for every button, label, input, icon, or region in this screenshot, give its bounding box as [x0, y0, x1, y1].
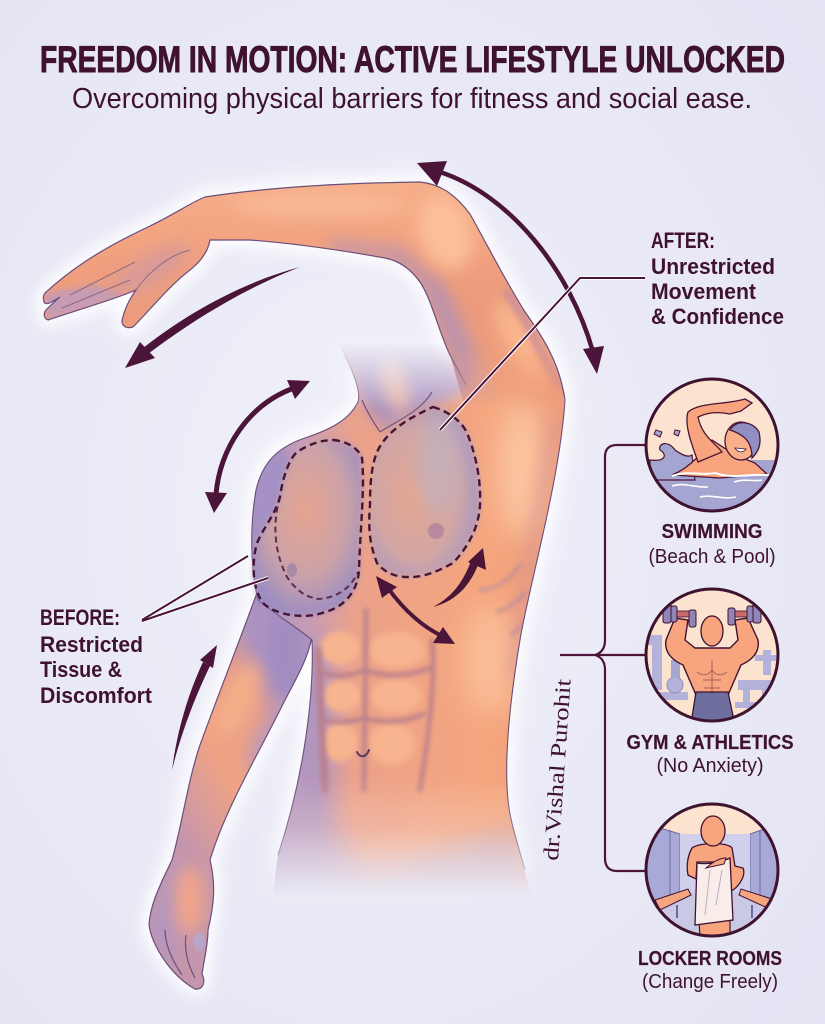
locker rooms label: [638, 948, 782, 993]
arrow: chest diagonal: [376, 576, 455, 644]
locker rooms label: (Change Freely): [642, 971, 778, 993]
before label: Discomfort: [40, 683, 153, 708]
gym label: (No Anxiety): [656, 755, 764, 777]
arrow: top rotation: [417, 161, 604, 374]
bracket connector: [560, 445, 645, 871]
arrow: shoulder: [205, 380, 310, 513]
after label: [651, 228, 784, 329]
after label: Unrestricted: [651, 254, 775, 279]
body glow: [43, 182, 565, 989]
signature: dr.Vishal Purohit: [538, 678, 576, 861]
before label: BEFORE:: [40, 605, 120, 630]
chest region: right: [369, 407, 480, 577]
callout lines: before: [142, 556, 268, 621]
after label: AFTER:: [651, 228, 715, 253]
swimming label: [648, 521, 776, 568]
before label: [40, 605, 153, 708]
raised arm: [43, 182, 565, 425]
arrow: arm sweep: [125, 267, 300, 368]
gym label: [626, 732, 794, 777]
after label: & Confidence: [651, 304, 784, 329]
before label: Tissue &: [40, 657, 122, 682]
icon: gym: [646, 589, 780, 730]
swimming label: (Beach & Pool): [648, 546, 776, 568]
callout line: after: [440, 278, 645, 430]
gym label: GYM & ATHLETICS: [626, 732, 794, 754]
body illustration: [43, 182, 565, 990]
subtitle: Overcoming physical barriers for fitness and social ease.: [72, 83, 752, 115]
neck and collar lines: [362, 392, 432, 432]
abdominal muscles: [318, 610, 433, 790]
arrow: chest upward: [433, 548, 486, 607]
icon: swimming: [644, 378, 780, 512]
icon: locker room: [644, 802, 780, 938]
before label: Restricted: [40, 632, 143, 657]
nipple: [428, 523, 444, 539]
torso: [252, 335, 565, 900]
arrow: lower arm: [172, 645, 217, 770]
lowered arm: [149, 590, 312, 990]
chest region: left: [254, 440, 363, 616]
after label: Movement: [651, 279, 757, 304]
locker rooms label: LOCKER ROOMS: [638, 948, 782, 970]
swimming label: SWIMMING: [662, 521, 762, 543]
serratus muscles: [480, 565, 530, 635]
